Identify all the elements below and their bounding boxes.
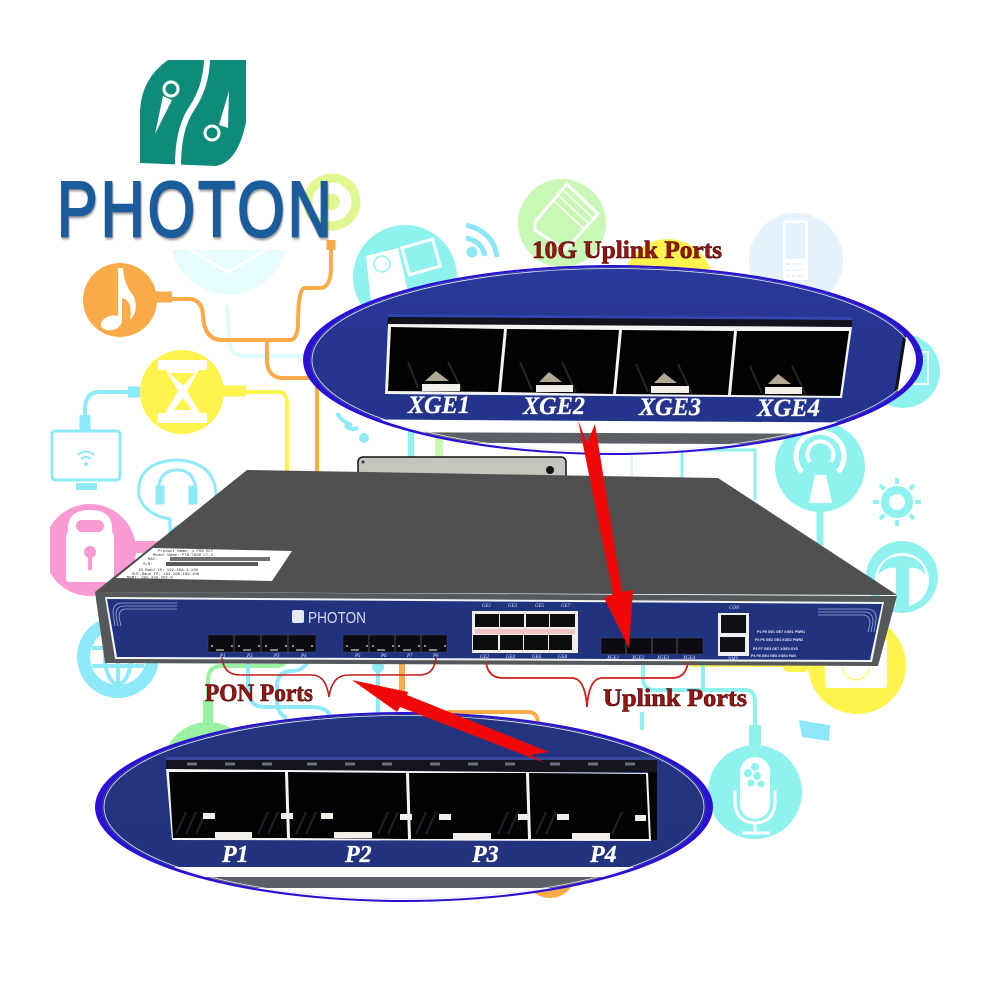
bracket: PON ports bbox=[222, 658, 436, 697]
magnifier background bbox=[102, 714, 706, 900]
XGE uplink ports: XGE4 bbox=[682, 656, 696, 661]
icon: small wifi arcs bbox=[337, 413, 369, 443]
network switch bbox=[95, 470, 897, 666]
GE ethernet ports: GE1 bbox=[482, 604, 491, 609]
cyan outlined rectangle bbox=[682, 450, 755, 500]
yellow connector line bbox=[222, 392, 287, 472]
label: Uplink Ports: Uplink Ports bbox=[603, 685, 747, 712]
switch top cover bbox=[95, 470, 897, 595]
PON ports P1-P4: P1 bbox=[219, 654, 226, 659]
port latches bbox=[422, 371, 802, 394]
inner highlight bbox=[312, 268, 914, 452]
icon: headphones circle bbox=[866, 541, 938, 613]
GE ethernet ports: GE5 bbox=[535, 604, 545, 609]
icon: antenna circle bbox=[775, 422, 865, 545]
port labels: P1 bbox=[221, 842, 249, 868]
PON ports P5-P8: P8 bbox=[432, 654, 439, 659]
corner decoration left bbox=[113, 603, 177, 626]
CON and NMS ports bbox=[718, 606, 749, 662]
PON ports P1-P4 bbox=[208, 635, 316, 659]
icon: right cyan picture circle bbox=[866, 334, 940, 408]
icon: headphones bubble bbox=[139, 460, 216, 531]
PON ports P5-P8: P7 bbox=[406, 654, 413, 659]
XGE uplink ports: XGE1 bbox=[606, 656, 619, 661]
GE ethernet ports: GE2 bbox=[480, 655, 490, 660]
heading: 10G Uplink Ports: 10G Uplink Ports bbox=[532, 237, 722, 264]
magnifier background bbox=[310, 267, 916, 453]
callout: 10G uplink ports magnified bbox=[300, 260, 930, 460]
icon: globe bbox=[77, 616, 159, 698]
LED indicator legend: P1 P5 GE1 GE7 XGE1 PWR1 bbox=[757, 630, 805, 634]
device label sticker: MGMT: 255.255.255.0 bbox=[127, 576, 173, 580]
device label sticker bbox=[116, 548, 292, 581]
device label sticker: Product Name: 4 PON OLT bbox=[158, 549, 214, 554]
callout: PON ports magnified bbox=[90, 705, 720, 905]
icon: faint envelope circle bbox=[172, 250, 310, 356]
icon: folder bbox=[799, 720, 830, 741]
PON ports P5-P8: P6 bbox=[380, 654, 387, 659]
PON ports P1-P4: P2 bbox=[246, 654, 253, 659]
CON and NMS ports: CON bbox=[729, 606, 740, 611]
GE ethernet ports: GE4 bbox=[506, 655, 516, 660]
lower connector lines bbox=[163, 660, 576, 898]
device label sticker: MAC: bbox=[148, 558, 158, 562]
CON and NMS ports: NMS bbox=[727, 657, 738, 662]
inner highlight bbox=[104, 716, 704, 898]
PON ports P1-P4: P3 bbox=[273, 654, 280, 659]
port labels: P2 bbox=[344, 842, 372, 868]
port block bbox=[166, 760, 657, 841]
LED indicator legend: P2 P6 GE2 GE4 XGE2 PWR2 bbox=[755, 638, 803, 642]
LED indicator legend: P4 P8 GE4 GE8 XGE4 FAN bbox=[751, 654, 796, 658]
device label sticker: IN-Band IP: 192.168.1.100 bbox=[138, 568, 199, 573]
icon: orange music note bbox=[83, 263, 157, 337]
icon: wifi monitor bbox=[52, 392, 140, 490]
port block bbox=[385, 317, 852, 398]
port labels: XGE4 bbox=[756, 395, 820, 422]
GE ethernet ports: GE3 bbox=[508, 604, 518, 609]
bracket: Uplink ports bbox=[486, 662, 688, 707]
background: connected media icons bbox=[44, 178, 940, 898]
port labels: P4 bbox=[589, 842, 617, 868]
panel logo: PHOTON bbox=[308, 610, 366, 627]
label: PON Ports: PON Ports bbox=[205, 680, 313, 707]
device label sticker: OUT-Band IP: 192.168.100.100 bbox=[132, 572, 200, 577]
icon: camera circle bbox=[353, 225, 457, 329]
PON ports P5-P8: P5 bbox=[354, 654, 361, 659]
GE ethernet ports: GE7 bbox=[561, 604, 571, 609]
GE ethernet ports bbox=[472, 604, 578, 660]
vertical connector stubs above switch bbox=[408, 425, 633, 480]
orange connector lines bbox=[155, 240, 331, 472]
GE ethernet ports: GE8 bbox=[558, 655, 568, 660]
logo leaf mark bbox=[140, 60, 246, 166]
arrow: 10G callout to XGE ports bbox=[578, 420, 633, 648]
LED indicator legend: P3 P7 GE3 GE7 XGE3 SYS bbox=[753, 647, 799, 651]
device label sticker: Model Name: PTN 7800 LT-4 bbox=[153, 553, 214, 558]
XGE uplink ports: XGE3 bbox=[656, 656, 670, 661]
icon: pink padlock bbox=[44, 504, 160, 596]
switch front panel bbox=[105, 597, 884, 662]
PON ports P5-P8 bbox=[343, 635, 447, 659]
icon: microphone circle bbox=[642, 665, 802, 839]
icon: gear bbox=[873, 478, 921, 526]
port labels bbox=[407, 392, 820, 422]
icon: wifi signal bbox=[466, 225, 497, 257]
XGE uplink ports bbox=[601, 638, 703, 661]
icon: phone circle bbox=[749, 213, 843, 307]
ellipse border bbox=[303, 265, 923, 455]
LED indicator legend bbox=[751, 630, 805, 658]
port labels: XGE2 bbox=[522, 393, 585, 420]
port labels: XGE1 bbox=[407, 392, 470, 419]
GE ethernet ports: GE6 bbox=[532, 655, 542, 660]
rear mounting plate bbox=[358, 457, 566, 487]
icon: yellow circle bbox=[690, 616, 906, 714]
corner decoration right bbox=[818, 609, 876, 632]
port labels bbox=[221, 842, 617, 868]
logo wordmark: PHOTON bbox=[57, 166, 335, 253]
PON ports P1-P4: P4 bbox=[300, 654, 307, 659]
arrow: PON callout to PON ports bbox=[352, 680, 549, 763]
switch front edge bbox=[95, 592, 897, 666]
ellipse border bbox=[95, 712, 713, 902]
icon: yellow hourglass bbox=[140, 350, 224, 434]
logo: Photon bbox=[57, 60, 335, 253]
icon: lime ring bbox=[308, 178, 356, 226]
device label sticker: S/N: bbox=[143, 562, 153, 567]
port labels: P3 bbox=[471, 842, 499, 868]
yellow circle behind heading bbox=[623, 239, 713, 329]
port labels: XGE3 bbox=[638, 394, 701, 421]
port latches bbox=[203, 813, 646, 839]
XGE uplink ports: XGE2 bbox=[631, 656, 645, 661]
icon: green document circle bbox=[518, 179, 606, 267]
